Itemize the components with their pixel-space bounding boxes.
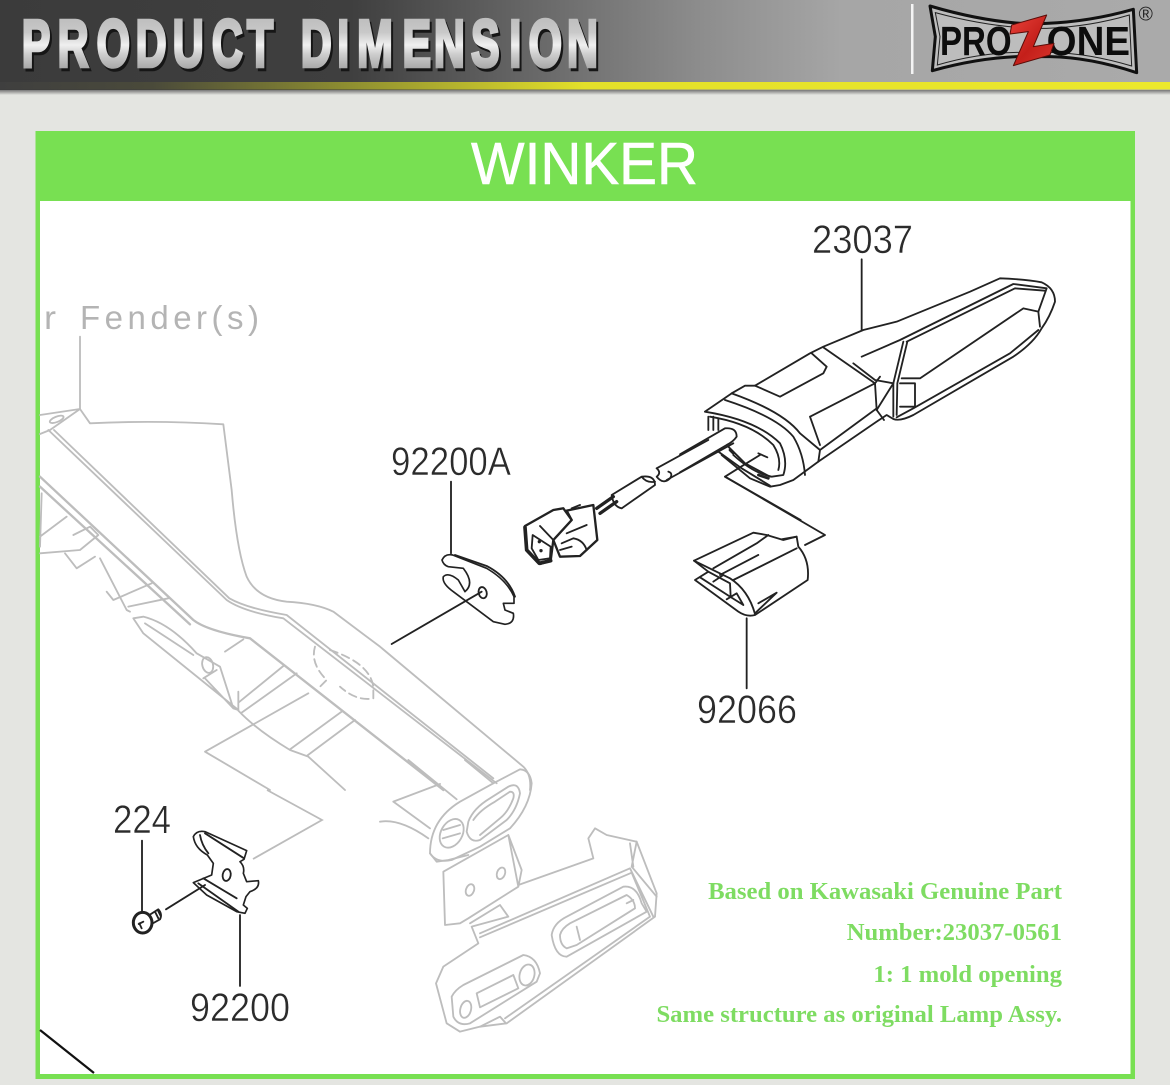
diagram: fender extension and license bracket: [380, 760, 657, 1032]
part: bracket 92200: [166, 831, 259, 986]
logo: prozone: ®: [1139, 5, 1153, 26]
fender label: Fender(s): [80, 299, 259, 336]
title: product dimension: [22, 6, 600, 84]
logo: prozone: ONE: [1047, 18, 1130, 64]
part: lamp socket 92066: [694, 477, 825, 688]
note text block: Number:23037-0561: [847, 919, 1062, 946]
part: connector wire: [525, 440, 733, 564]
header banner: [0, 0, 1170, 95]
logo: prozone: [930, 5, 1153, 73]
label: 224: 224: [113, 798, 171, 842]
title: product dimension: PRODUCT: [24, 9, 275, 84]
header divider: [911, 4, 914, 74]
title: product dimension: DIMENSION: [303, 9, 600, 84]
label: 92200A: 92200A: [391, 440, 511, 484]
stray diagram line bottom left: [40, 1030, 94, 1073]
part: screw 224: [133, 841, 161, 933]
note text block: [656, 878, 1063, 1028]
part: clip 92200a: [392, 482, 515, 644]
label: 92066: 92066: [697, 688, 797, 732]
label: 23037: 23037: [812, 218, 913, 262]
part number labels: [113, 218, 913, 1030]
logo: prozone: PRO: [940, 18, 1012, 64]
title: product dimension: PRODUCT: [22, 6, 273, 81]
diagram: rear exploded guide lines: [253, 790, 322, 859]
note text block: 1: 1 mold opening: [873, 961, 1063, 988]
fender label: r: [44, 299, 56, 336]
panel heading: winker: WINKER: [471, 131, 698, 197]
label: 92200: 92200: [190, 986, 290, 1030]
part: turn signal 23037: [680, 259, 1055, 520]
note text block: Same structure as original Lamp Assy.: [656, 1001, 1062, 1028]
title: product dimension: DIMENSION: [301, 6, 598, 81]
diagram: rear fender: [40, 337, 530, 790]
note text block: Based on Kawasaki Genuine Part: [708, 878, 1063, 905]
